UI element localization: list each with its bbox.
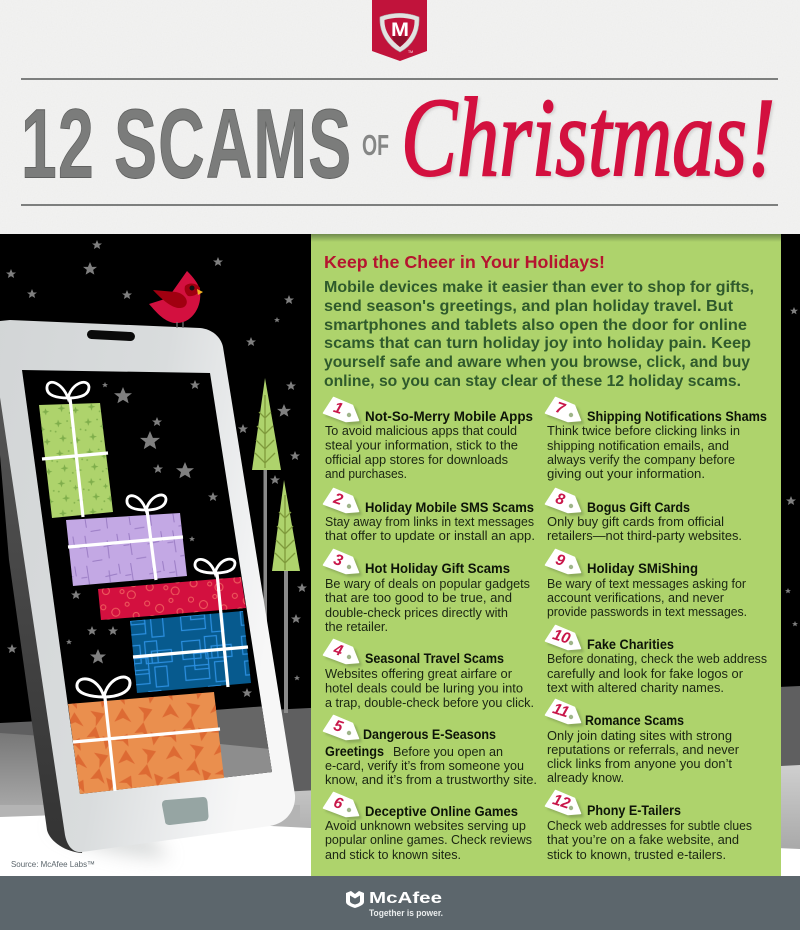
- item 7: giving out your information.: [547, 466, 705, 481]
- item 4: hotel deals could be luring you into: [325, 680, 523, 696]
- item 4: Seasonal Travel Scams: [365, 651, 504, 666]
- item 2: [324, 488, 535, 543]
- item 10: Before donating, check the web address: [547, 651, 767, 666]
- item 8: Bogus Gift Cards: [587, 500, 690, 515]
- item 2: 2: [330, 490, 345, 509]
- item 7: shipping notification emails, and: [547, 438, 729, 453]
- item 10: [546, 626, 767, 695]
- item 10: carefully and look for fake logos or: [547, 666, 744, 681]
- item 11: click links from anyone you don’t: [547, 756, 732, 771]
- screen stars: [66, 380, 252, 697]
- item 11: already know.: [547, 770, 624, 785]
- item 7: Think twice before clicking links in: [547, 423, 740, 438]
- icon: McAfee shield: [346, 891, 364, 908]
- item 6: [324, 792, 532, 862]
- item 5: Greetings: [325, 744, 384, 759]
- item 1: To avoid malicious apps that could: [325, 423, 517, 438]
- item 4: a trap, double-check before you click.: [325, 695, 534, 710]
- item 8: Only buy gift cards from official: [547, 514, 724, 529]
- item 5: [324, 716, 537, 787]
- snowy ground: [0, 686, 800, 876]
- gift: blue: [130, 559, 251, 693]
- item 5: Dangerous E-Seasons: [363, 727, 496, 742]
- item 6: Deceptive Online Games: [365, 804, 518, 819]
- item 12: [546, 790, 752, 862]
- item 1: steal your information, stick to the: [325, 438, 518, 452]
- item 3: [324, 550, 530, 634]
- logo ribbon badge: M: [391, 20, 409, 41]
- icon: red cardinal: [149, 271, 203, 328]
- item 5: e-card, verify it’s from someone you: [325, 758, 524, 773]
- title: 12 Scams of Christmas: OF: [362, 130, 389, 162]
- item 11: [546, 700, 740, 785]
- intro paragraph: Mobile devices make it easier than ever to shop for gifts,: [324, 279, 754, 296]
- item 10: 10: [551, 626, 573, 648]
- intro paragraph: send season's greetings, and plan holiday travel. But: [324, 298, 733, 315]
- item 9: Be wary of text messages asking for: [547, 576, 747, 591]
- intro paragraph: smartphones and tablets also open the door for online: [324, 317, 747, 334]
- item 1: official app stores for downloads: [325, 452, 508, 467]
- item 3: double-check prices directly with: [325, 605, 508, 620]
- page background: night sky: [0, 234, 800, 876]
- item 3: Hot Holiday Gift Scams: [365, 561, 510, 576]
- source note: Source: McAfee Labs™: [11, 859, 95, 869]
- item 10: Fake Charities: [587, 637, 674, 652]
- item 9: account verifications, and never: [547, 590, 725, 605]
- item 5: know, and it’s from a trustworthy site.: [325, 772, 537, 787]
- item 1: Not-So-Merry Mobile Apps: [365, 409, 533, 424]
- phone: [0, 320, 295, 853]
- item 3: Be wary of deals on popular gadgets: [325, 576, 530, 591]
- item 3: the retailer.: [325, 619, 388, 634]
- item 12: stick to known, trusted e-tailers.: [547, 847, 726, 862]
- gift: orange: [68, 677, 224, 794]
- tagline: Together is power.: [369, 908, 443, 918]
- intro heading: Keep the Cheer in Your Holidays!: [324, 252, 605, 272]
- item 3: that are too good to be true, and: [325, 590, 512, 605]
- item 9: Holiday SMiShing: [587, 561, 698, 576]
- item 6: Avoid unknown websites serving up: [325, 818, 526, 833]
- item 3: 3: [331, 551, 345, 570]
- item 4: [324, 640, 534, 710]
- intro paragraph: [324, 279, 754, 390]
- item 2: that offer to update or install an app.: [325, 528, 535, 543]
- title: 12 Scams of Christmas: [21, 76, 777, 202]
- title: 12 Scams of Christmas: 12 SCAMS: [21, 89, 351, 199]
- item 8: [546, 488, 742, 543]
- item 8: 8: [553, 490, 567, 509]
- item 12: 12: [551, 791, 573, 813]
- gift: red: [98, 577, 246, 620]
- intro paragraph: yourself safe and aware when you browse, click, and buy: [324, 354, 750, 371]
- item 11: reputations or referrals, and never: [547, 742, 740, 757]
- item 7: 7: [553, 399, 568, 418]
- gift: purple: [66, 495, 187, 586]
- intro paragraph: online, so you can stay clear of these 12 holiday scams.: [324, 373, 741, 390]
- item 11: Only join dating sites with strong: [547, 728, 732, 743]
- item 9: provide passwords in text messages.: [547, 604, 747, 619]
- item 4: Websites offering great airfare or: [325, 666, 513, 681]
- item 11: Romance Scams: [585, 713, 684, 728]
- item 8: retailers—not third-party websites.: [547, 528, 742, 543]
- item 4: 4: [330, 641, 345, 660]
- trees: [252, 378, 300, 713]
- logo ribbon badge: [372, 0, 427, 61]
- item 1: and purchases.: [325, 466, 407, 481]
- intro paragraph: scams that can turn holiday joy into holiday pain. Keep: [324, 335, 751, 352]
- panel: green scam list: [311, 234, 781, 876]
- background stars: [6, 240, 798, 680]
- item 12: Phony E-Tailers: [587, 803, 681, 818]
- item 12: that you’re on a fake website, and: [547, 832, 739, 847]
- item 5: 5: [331, 717, 345, 736]
- item 7: [546, 398, 767, 481]
- item 6: popular online games. Check reviews: [325, 832, 532, 847]
- item 9: 9: [553, 551, 567, 570]
- logo ribbon badge: TM: [408, 50, 413, 54]
- item 7: always verify the company before: [547, 452, 735, 467]
- logo wordmark: McAfee: [369, 890, 442, 907]
- item 12: Check web addresses for subtle clues: [547, 818, 752, 833]
- item 10: text with altered charity names.: [547, 680, 724, 695]
- item 6: and stick to known sites.: [325, 847, 461, 862]
- footer band with logo: [0, 876, 800, 930]
- item 6: 6: [331, 794, 345, 813]
- item 11: 11: [551, 700, 571, 721]
- item 1: [324, 398, 533, 481]
- item 2: Holiday Mobile SMS Scams: [365, 500, 534, 515]
- gift: green: [39, 382, 113, 518]
- item 1: 1: [331, 399, 345, 418]
- item 9: [546, 550, 747, 619]
- item 2: Stay away from links in text messages: [325, 514, 534, 529]
- item 7: Shipping Notifications Shams: [587, 409, 767, 424]
- header band: [0, 0, 800, 234]
- item 5: Before you open an: [393, 744, 503, 759]
